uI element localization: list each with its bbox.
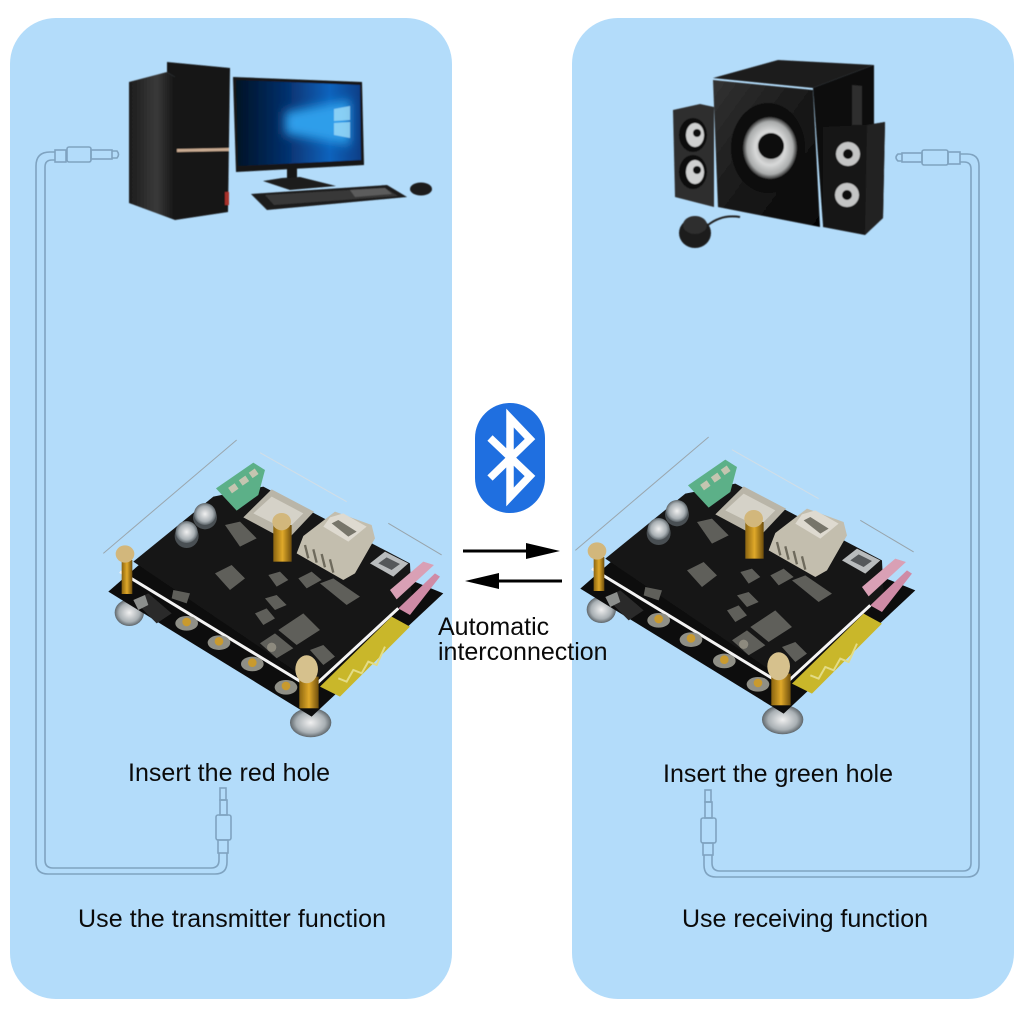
label: use the transmitter function: Use the transmitter function bbox=[78, 905, 386, 933]
label: automatic interconnection: interconnection bbox=[438, 638, 608, 666]
keyboard bbox=[251, 185, 407, 210]
left satellite speaker bbox=[673, 104, 714, 207]
icon: desktop computer bbox=[129, 62, 432, 220]
circuit board: transmitter bbox=[103, 440, 443, 737]
circuit board: receiver bbox=[575, 437, 915, 734]
icon: bluetooth bbox=[475, 403, 545, 513]
cable: transmitter audio lead bbox=[36, 147, 231, 874]
label: automatic interconnection: Automatic bbox=[438, 613, 549, 641]
icon: speakers bbox=[673, 60, 885, 248]
right satellite speaker bbox=[823, 122, 885, 235]
mouse bbox=[410, 182, 432, 196]
label: insert the red hole: Insert the red hole bbox=[128, 759, 330, 787]
label: insert the green hole: Insert the green hole bbox=[663, 760, 893, 788]
panel: transmitter bbox=[10, 18, 452, 999]
subwoofer bbox=[713, 60, 874, 227]
panel: receiver bbox=[572, 18, 1014, 999]
arrow: towards receiver bbox=[463, 543, 560, 559]
computer monitor bbox=[233, 77, 364, 190]
volume knob bbox=[679, 216, 740, 248]
computer tower bbox=[129, 62, 230, 220]
arrow: towards transmitter bbox=[465, 573, 562, 589]
label: use receiving function: Use receiving function bbox=[682, 905, 928, 933]
cable: receiver audio lead bbox=[701, 150, 979, 877]
